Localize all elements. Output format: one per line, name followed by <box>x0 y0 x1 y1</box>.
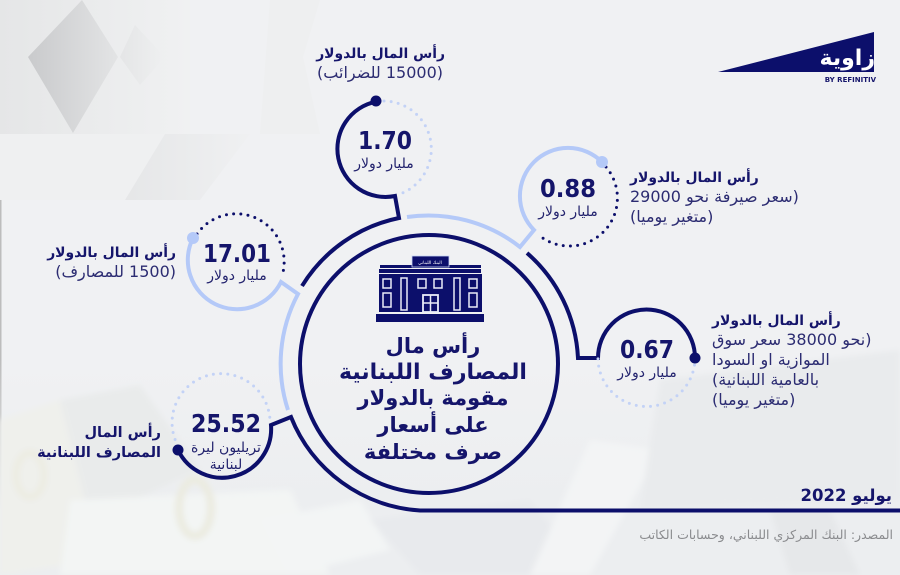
label: sayrafa rate: (سعر صيرفة نحو 29000 <box>630 187 799 207</box>
source: المصدر: البنك المركزي اللبناني، وحسابات الكاتب <box>639 527 893 543</box>
value: 0.88 <box>537 174 598 220</box>
label: banks rate <box>46 243 176 282</box>
connector: 0.88 circle and arc <box>407 148 617 247</box>
label: sayrafa rate: رأس المال بالدولار <box>629 168 759 186</box>
logo <box>718 32 877 84</box>
label: capital in lira <box>37 423 161 461</box>
value: 17.01 <box>203 239 271 284</box>
value: 0.67: 0.67 <box>620 335 674 364</box>
date: يوليو 2022 <box>800 486 892 506</box>
label: capital in lira: رأس المال <box>84 423 161 441</box>
label: parallel market rate: بالعامية اللبنانية) <box>712 370 819 389</box>
value: 25.52: لبنانية <box>210 457 242 473</box>
value: 1.70: مليار دولار <box>353 156 414 172</box>
label: parallel market rate <box>711 311 872 410</box>
connector: 17.01 circle and arc <box>187 214 298 410</box>
central title <box>339 331 527 464</box>
value: 0.88: 0.88 <box>540 174 596 203</box>
value: 25.52: 25.52 <box>191 409 261 438</box>
logo: BY REFINITIV <box>825 76 877 84</box>
value: 25.52: تريليون ليرة <box>191 440 261 456</box>
icon: bank building <box>376 256 484 322</box>
logo: زاوية <box>820 46 875 71</box>
label: sayrafa rate <box>629 168 799 227</box>
value: 17.01: مليار دولار <box>206 268 267 284</box>
central title: على أسعار <box>376 410 489 437</box>
icon: bank building: البنك اللبناني <box>418 261 442 266</box>
value: 0.67: مليار دولار <box>616 365 677 381</box>
label: parallel market rate: رأس المال بالدولار <box>711 311 841 329</box>
label: tax rate: (15000 للضرائب) <box>317 63 443 83</box>
central title: رأس مال <box>386 331 480 358</box>
label: parallel market rate: (متغير يوميا) <box>712 390 795 410</box>
central title: صرف مختلفة <box>364 440 502 464</box>
value: 1.70 <box>353 126 414 172</box>
label: sayrafa rate: (متغير يوميا) <box>630 207 713 227</box>
value: 1.70: 1.70 <box>358 126 412 155</box>
value: 0.67 <box>616 335 677 381</box>
central title: مقومة بالدولار <box>357 386 508 410</box>
label: tax rate: رأس المال بالدولار <box>315 44 445 62</box>
label: banks rate: رأس المال بالدولار <box>46 243 176 261</box>
value: 17.01: 17.01 <box>203 239 271 268</box>
connector: 1.70 circle and arc <box>302 96 431 286</box>
value: 0.88: مليار دولار <box>537 204 598 220</box>
label: capital in lira: المصارف اللبنانية <box>37 445 161 461</box>
label: banks rate: (1500 للمصارف) <box>55 262 176 282</box>
central title: المصارف اللبنانية <box>339 360 527 385</box>
central circle <box>300 235 558 493</box>
label: tax rate <box>315 44 445 83</box>
connector: 0.67 circle and arc <box>527 253 700 406</box>
value: 25.52 <box>191 409 261 473</box>
label: parallel market rate: الموازية او السودا <box>712 350 830 370</box>
label: parallel market rate: (نحو 38000 سعر سوق <box>712 330 872 350</box>
connector: 25.52 circle and baseline rule <box>172 374 900 510</box>
